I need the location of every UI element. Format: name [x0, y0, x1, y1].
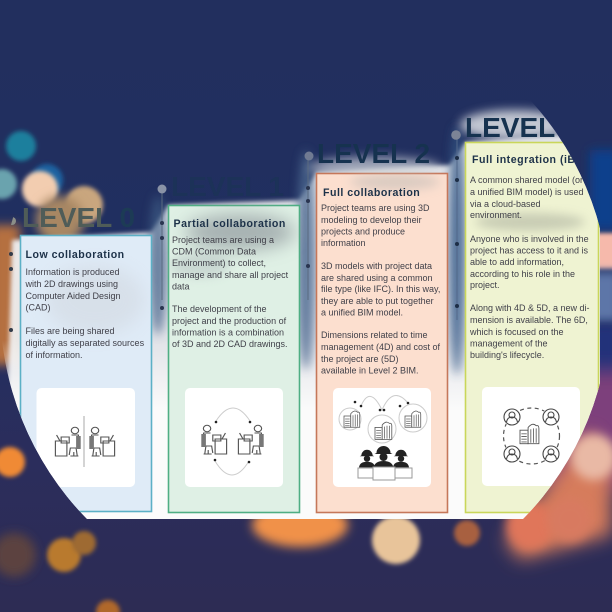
card title: Full integration (iBIM) [472, 154, 592, 166]
card text: a unified BIM model. [321, 308, 403, 318]
card title: Low collaboration [26, 249, 125, 261]
card text: project and the production of [172, 316, 287, 326]
card text: are shared using a common [321, 273, 433, 283]
panel: level 2 [304, 138, 448, 512]
card text: A common shared model (or [470, 175, 583, 185]
timeline level 0 [9, 217, 16, 332]
card text: Information is produced [26, 267, 120, 277]
card text: building's lifecycle. [470, 350, 544, 360]
card text: according to his role in the [470, 269, 575, 279]
card: full collaboration [316, 174, 448, 512]
card text: they are able to put together [321, 296, 434, 306]
card text: The development of the [172, 304, 267, 314]
heading: level 3: LEVEL 3 [465, 112, 578, 143]
card text: with 2D drawings using [24, 279, 118, 289]
card: full integration [466, 142, 598, 512]
card text: Environment) to collect, [172, 258, 266, 268]
card text: available in Level 2 BIM. [321, 366, 419, 376]
card text: environment. [470, 210, 522, 220]
card text: CDM (Common Data [172, 246, 256, 256]
card text: able to add information, [470, 257, 564, 267]
card text: project has access to it and is [470, 246, 589, 256]
card text: the project are (5D) [321, 354, 399, 364]
card text: manage and share all project [172, 270, 289, 280]
icon box: shared BIM model team [333, 388, 431, 487]
icon box: connected workers [185, 388, 283, 487]
timeline level 1 [158, 184, 166, 310]
card text: 3D models with project data [321, 261, 432, 271]
card title: Partial collaboration [174, 218, 286, 230]
timeline level 2 [304, 152, 314, 300]
card: partial collaboration [168, 206, 300, 512]
card text: Project teams are using a [172, 235, 274, 245]
card text: Dimensions related to time [321, 330, 428, 340]
card text: Project teams are using 3D [321, 203, 430, 213]
card text: Files are being shared [26, 326, 115, 336]
card text: mension is available. The 6D, [470, 315, 588, 325]
heading: level 2: LEVEL 2 [317, 138, 430, 169]
card title: Full collaboration [323, 187, 420, 199]
card text: project. [470, 280, 500, 290]
panel: level 3 [451, 112, 598, 512]
card text: projects and produce [321, 226, 405, 236]
card text: Anyone who is involved in the [470, 234, 589, 244]
card text: via a cloud-based [470, 199, 541, 209]
panel: level 1 [158, 171, 300, 512]
panel: level 0 [8, 202, 152, 512]
card text: modeling to develop their [321, 215, 422, 225]
card text: Computer Aided Design [26, 291, 121, 301]
card text: management of the [470, 338, 548, 348]
circular infographic disc [0, 110, 612, 519]
card text: of 3D and 2D CAD drawings. [172, 339, 288, 349]
card text: data [172, 282, 190, 292]
card text: Along with 4D & 5D, a new di- [470, 303, 590, 313]
timeline level 3 [451, 130, 461, 320]
card: low collaboration [20, 236, 152, 512]
card text: information is a combination [172, 328, 284, 338]
card text: digitally as separated sources [26, 338, 145, 348]
card text: file type (like IFC). In this way, [321, 284, 440, 294]
card text: management (4D) and cost of [321, 342, 441, 352]
heading: level 1: LEVEL 1 [171, 171, 284, 202]
card text: (CAD) [26, 302, 50, 312]
card text: of information. [26, 350, 83, 360]
heading: level 0: LEVEL 0 [22, 202, 135, 233]
icon box: separated workers [36, 388, 135, 487]
card text: which is focused on the [469, 327, 564, 337]
card text: information [321, 238, 366, 248]
infographic sheet [0, 110, 612, 519]
card text: a unified BIM model) is used [470, 187, 584, 197]
icon box: integrated model [482, 387, 580, 486]
